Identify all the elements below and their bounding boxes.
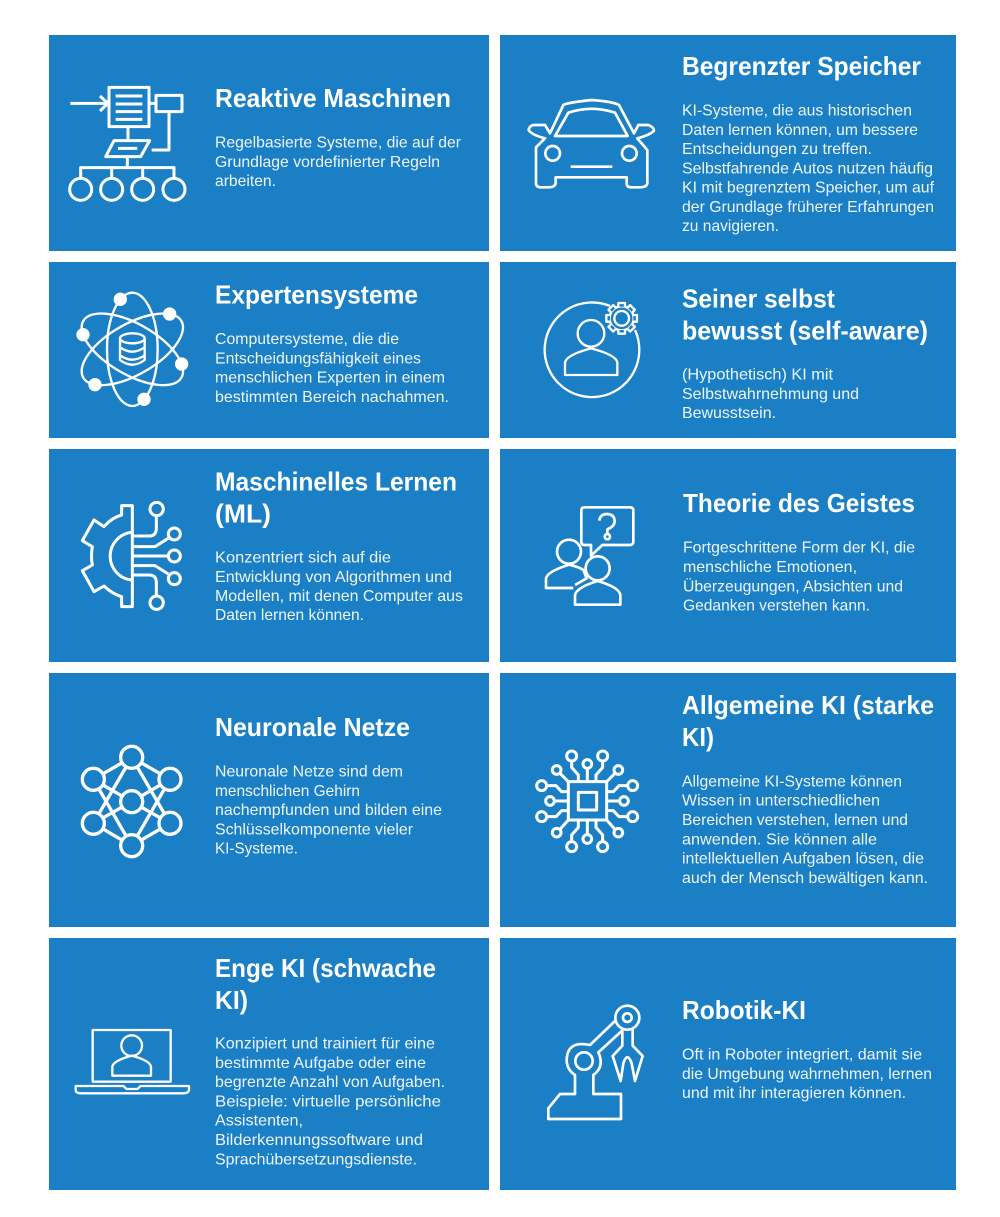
- text: Begrenzter Speicher description: der Grundlage früherer Erfahrungen: [682, 199, 934, 216]
- heading: Maschinelles Lernen: (ML): [215, 498, 271, 528]
- text: Neuronale Netze description: menschlichen Gehirn: [215, 783, 360, 800]
- panel: Expertensysteme: [49, 262, 489, 438]
- text: Reaktive Maschinen description: arbeiten.: [215, 173, 276, 190]
- text: Theorie des Geistes description: menschliche Emotionen,: [683, 559, 857, 576]
- text: Reaktive Maschinen description: Regelbasierte Systeme, die auf der: [215, 134, 462, 152]
- text: Allgemeine KI description: Bereichen verstehen, lernen und: [682, 812, 908, 829]
- text: Expertensysteme description: Computersysteme, die die: [215, 331, 399, 348]
- panel: Reaktive Maschinen: [49, 35, 489, 251]
- text: Robotik-KI description: [682, 1046, 932, 1102]
- text: Neuronale Netze description: nachempfunden und bilden eine: [215, 802, 442, 819]
- panel: Enge KI: [49, 938, 489, 1190]
- panel: Neuronale Netze: [49, 673, 489, 927]
- text: Seiner selbst description: (Hypothetisch) KI mit: [682, 366, 834, 384]
- panel: Theorie des Geistes: [500, 449, 956, 662]
- heading: Enge KI: [215, 953, 436, 1015]
- text: Robotik-KI description: die Umgebung wahrnehmen, lernen: [682, 1066, 932, 1083]
- text: Reaktive Maschinen description: [215, 134, 462, 190]
- text: Neuronale Netze description: KI-Systeme.: [215, 840, 298, 858]
- heading: Enge KI: Enge KI (schwache: [215, 953, 436, 983]
- icon: car: [529, 100, 654, 187]
- text: Maschinelles Lernen description: Modellen, mit denen Computer aus: [215, 588, 463, 605]
- heading: Seiner selbst bewusst: [682, 284, 928, 346]
- text: Begrenzter Speicher description: zu navigieren.: [682, 218, 779, 235]
- text: Enge KI description: begrenzte Anzahl von Aufgaben.: [215, 1074, 445, 1091]
- panel: Maschinelles Lernen: [49, 449, 489, 662]
- panel: Seiner selbst bewusst: [500, 262, 956, 438]
- heading: Allgemeine KI: [682, 690, 934, 752]
- icon: processor chip: [537, 751, 638, 852]
- text: Enge KI description: Bilderkennungssoftware und: [215, 1132, 423, 1149]
- text: Robotik-KI description: und mit ihr interagieren können.: [682, 1085, 906, 1102]
- text: Maschinelles Lernen description: [215, 550, 463, 624]
- text: Allgemeine KI description: anwenden. Sie können alle: [682, 832, 877, 848]
- text: Allgemeine KI description: auch der Mensch bewältigen kann.: [682, 870, 928, 887]
- text: Enge KI description: Sprachübersetzungsdienste.: [215, 1152, 417, 1168]
- heading: Reaktive Maschinen: Reaktive Maschinen: [215, 83, 451, 113]
- heading: Expertensysteme: Expertensysteme: [215, 280, 418, 310]
- heading: Seiner selbst bewusst: Seiner selbst: [682, 284, 835, 314]
- panel: Begrenzter Speicher: [500, 35, 956, 251]
- heading: Neuronale Netze: Neuronale Netze: [215, 712, 410, 742]
- text: Theorie des Geistes description: Fortgeschrittene Form der KI, die: [683, 540, 915, 556]
- text: Neuronale Netze description: Neuronale Netze sind dem: [215, 764, 403, 780]
- text: Maschinelles Lernen description: Konzentriert sich auf die: [215, 550, 391, 566]
- icon: people with question bubble: [546, 507, 633, 605]
- heading: Allgemeine KI: KI): [682, 722, 714, 752]
- text: Expertensysteme description: bestimmten Bereich nachahmen.: [215, 389, 449, 406]
- text: Expertensysteme description: Entscheidungsfähigkeit eines: [215, 350, 421, 368]
- icon: half gear with circuit: [82, 502, 180, 609]
- heading: Theorie des Geistes: Theorie des Geistes: [683, 488, 915, 518]
- icon: laptop with user: [76, 1030, 189, 1093]
- text: Enge KI description: bestimmte Aufgabe oder eine: [215, 1055, 426, 1072]
- text: Robotik-KI description: Oft in Roboter integriert, damit sie: [682, 1046, 922, 1064]
- text: Enge KI description: Konzipiert und trainiert für eine: [215, 1036, 435, 1052]
- text: Expertensysteme description: menschlichen Experten in einem: [215, 370, 445, 386]
- icon: atom with database: [71, 293, 194, 406]
- icon: self-aware person with gear: [545, 302, 639, 397]
- text: Begrenzter Speicher description: [682, 102, 935, 235]
- text: Allgemeine KI description: intellektuellen Aufgaben lösen, die: [682, 850, 924, 868]
- heading: Seiner selbst bewusst: bewusst (self-aware): [682, 316, 928, 346]
- text: Expertensysteme description: [215, 331, 449, 406]
- icon: rule flowchart: [70, 87, 185, 200]
- text: Begrenzter Speicher description: Daten lernen können, um bessere: [682, 122, 918, 139]
- panel: Allgemeine KI: [500, 673, 956, 927]
- heading: Enge KI: KI): [215, 985, 248, 1015]
- text: Theorie des Geistes description: Gedanken verstehen kann.: [683, 598, 870, 614]
- text: Seiner selbst description: Selbstwahrnehmung und: [682, 386, 859, 403]
- text: Seiner selbst description: [682, 366, 859, 422]
- icon: neural network: [82, 746, 181, 857]
- heading: Allgemeine KI: Allgemeine KI (starke: [682, 690, 934, 720]
- text: Neuronale Netze description: [215, 764, 442, 858]
- text: Theorie des Geistes description: Überzeugungen, Absichten und: [683, 578, 903, 596]
- text: Enge KI description: Beispiele: virtuelle persönliche: [215, 1094, 441, 1110]
- text: Begrenzter Speicher description: KI mit begrenztem Speicher, um auf: [682, 180, 935, 196]
- text: Begrenzter Speicher description: Entscheidungen zu treffen.: [682, 141, 872, 158]
- text: Theorie des Geistes description: [683, 540, 915, 614]
- text: Seiner selbst description: Bewusstsein.: [682, 405, 776, 422]
- text: Maschinelles Lernen description: Entwicklung von Algorithmen und: [215, 569, 452, 586]
- heading: Maschinelles Lernen: [215, 466, 457, 528]
- heading: Maschinelles Lernen: Maschinelles Lernen: [215, 466, 457, 496]
- icon: robot arm: [548, 1006, 643, 1119]
- text: Enge KI description: Assistenten,: [215, 1112, 303, 1130]
- text: Neuronale Netze description: Schlüsselkomponente vieler: [215, 822, 414, 838]
- text: Allgemeine KI description: Allgemeine KI-Systeme können: [682, 774, 902, 790]
- heading: Begrenzter Speicher: Begrenzter Speicher: [682, 51, 921, 81]
- text: Begrenzter Speicher description: KI-Systeme, die aus historischen: [682, 102, 912, 120]
- heading: Robotik-KI: Robotik-KI: [682, 995, 806, 1025]
- text: Allgemeine KI description: [682, 774, 928, 887]
- text: Reaktive Maschinen description: Grundlage vordefinierter Regeln: [215, 154, 440, 171]
- text: Enge KI description: [215, 1036, 445, 1168]
- text: Maschinelles Lernen description: Daten lernen können.: [215, 607, 364, 624]
- text: Begrenzter Speicher description: Selbstfahrende Autos nutzen häufig: [682, 160, 933, 178]
- text: Allgemeine KI description: Wissen in unterschiedlichen: [682, 792, 880, 810]
- panel: Robotik-KI: [500, 938, 956, 1190]
